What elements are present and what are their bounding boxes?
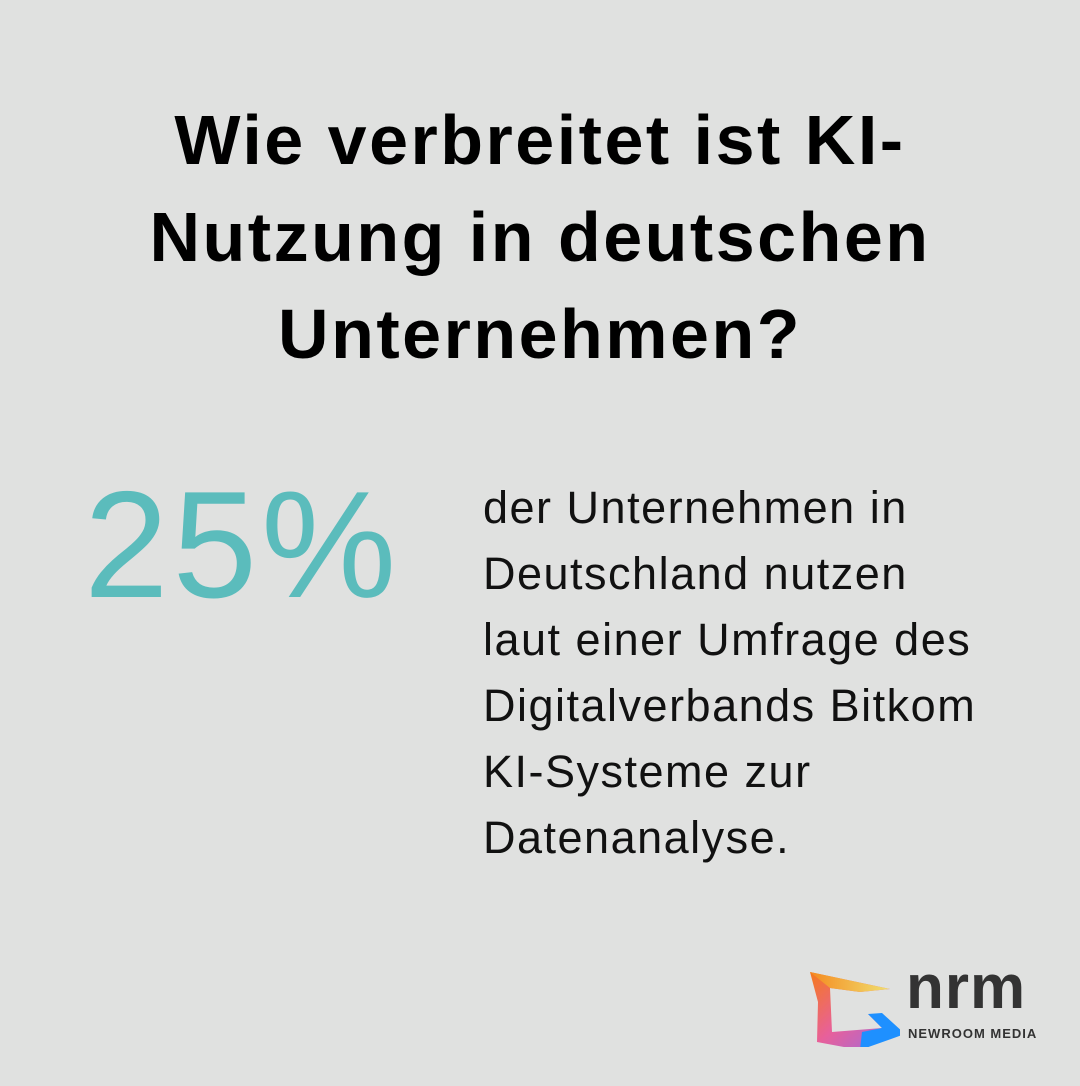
- title: [149, 101, 931, 373]
- description text: Deutschland nutzen: [483, 548, 908, 599]
- title: Unternehmen?: [278, 295, 802, 373]
- logo text: nrm: [906, 953, 1026, 1022]
- description text: Datenanalyse.: [483, 812, 790, 863]
- big number: 25%: [84, 460, 400, 630]
- icon: logo mark: [810, 972, 900, 1047]
- description text: laut einer Umfrage des: [483, 614, 971, 665]
- description text: der Unternehmen in: [483, 482, 908, 533]
- title: Nutzung in deutschen: [149, 198, 931, 276]
- logo: NEWROOM MEDIA: [908, 1026, 1037, 1041]
- logo: [810, 953, 1037, 1047]
- description text: [483, 482, 976, 863]
- description text: Digitalverbands Bitkom: [483, 680, 976, 731]
- title: Wie verbreitet ist KI-: [174, 101, 906, 179]
- description text: KI-Systeme zur: [483, 746, 812, 797]
